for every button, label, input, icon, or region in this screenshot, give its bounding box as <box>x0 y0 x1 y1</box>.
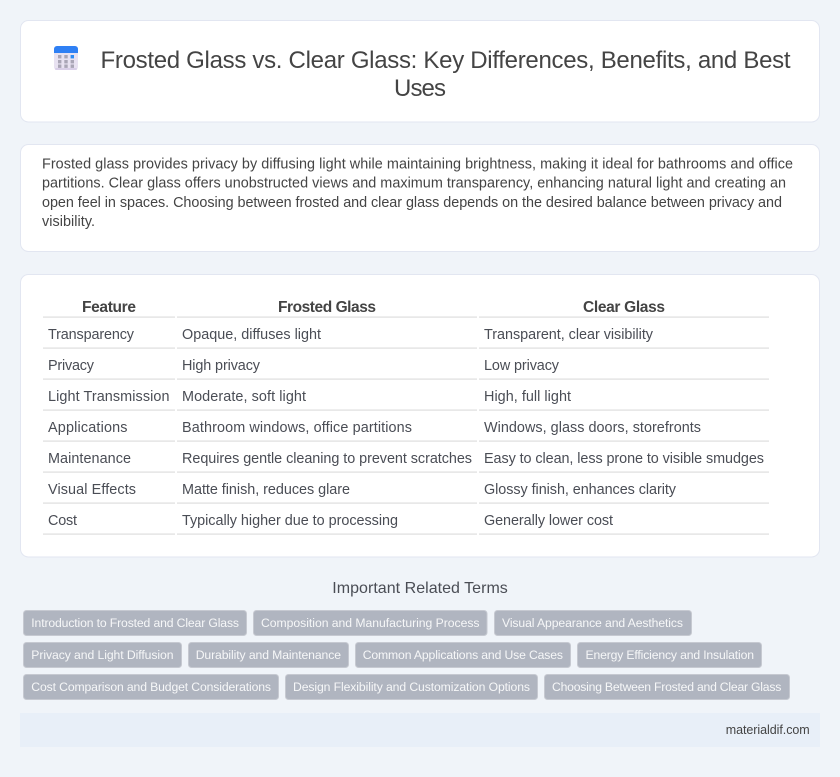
panel: related term tags <box>24 610 790 700</box>
row: visual effects: Matte finish, reduces glare <box>182 482 350 498</box>
footer: materialdif.com <box>726 723 810 737</box>
text block: introduction paragraph: visibility. <box>42 214 95 230</box>
row: maintenance: Easy to clean, less prone to visible smudges <box>484 451 764 467</box>
row: transparency: Transparent, clear visibility <box>484 327 654 343</box>
row: maintenance: Maintenance <box>48 451 131 467</box>
panel: title card <box>20 20 820 122</box>
tag <box>24 610 246 636</box>
row: privacy: Privacy <box>48 358 95 374</box>
text block: introduction paragraph <box>42 156 793 230</box>
panel: introduction <box>20 144 820 252</box>
tag: Durability and Maintenance <box>196 648 341 662</box>
tag <box>494 610 692 636</box>
row: cost: Generally lower cost <box>484 513 613 529</box>
table header <box>82 299 665 316</box>
tag <box>188 642 348 668</box>
row: visual effects <box>48 482 677 498</box>
tag: Visual Appearance and Aesthetics <box>502 616 683 630</box>
row: applications <box>48 420 701 436</box>
tag <box>254 610 487 636</box>
heading: important related terms: Important Related Terms <box>332 580 508 597</box>
tag <box>356 642 570 668</box>
row: light transmission <box>48 389 571 405</box>
row: cost: Cost <box>48 513 77 529</box>
table header: Frosted Glass <box>278 299 376 316</box>
row: cost <box>48 513 613 529</box>
footer <box>20 713 820 747</box>
row: transparency: Transparency <box>48 327 135 343</box>
row: light transmission: High, full light <box>484 389 571 405</box>
tag: Choosing Between Frosted and Clear Glass <box>552 680 781 694</box>
row: visual effects: Glossy finish, enhances clarity <box>484 482 677 498</box>
row: cost: Typically higher due to processing <box>182 513 398 529</box>
row: privacy: Low privacy <box>484 358 560 374</box>
tag <box>24 674 278 700</box>
title: Uses <box>394 75 446 102</box>
tag: Common Applications and Use Cases <box>363 648 563 662</box>
row: applications: Applications <box>48 420 128 436</box>
row: maintenance <box>48 451 764 467</box>
text block: introduction paragraph: Frosted glass provides privacy by diffusing light while maintaining brightness, making it ideal for bathrooms and office <box>42 156 793 172</box>
title: Frosted Glass vs. Clear Glass: Key Differences, Benefits, and Best <box>100 47 791 74</box>
icon: calendar <box>54 46 78 70</box>
row: privacy: High privacy <box>182 358 261 374</box>
title <box>100 47 791 102</box>
row: light transmission: Light Transmission <box>48 389 170 405</box>
tag: Design Flexibility and Customization Options <box>293 680 530 694</box>
row: applications: Bathroom windows, office partitions <box>182 420 412 436</box>
row: light transmission: Moderate, soft light <box>182 389 306 405</box>
tag: Privacy and Light Diffusion <box>31 648 173 662</box>
row: maintenance: Requires gentle cleaning to prevent scratches <box>182 451 472 467</box>
tag: Cost Comparison and Budget Considerations <box>31 680 271 694</box>
row: visual effects: Visual Effects <box>48 482 136 498</box>
table header: Clear Glass <box>583 299 665 316</box>
tag: Introduction to Frosted and Clear Glass <box>31 616 239 630</box>
text block: introduction paragraph: open feel in spaces. Choosing between frosted and clear glass depends on the desired balance between privacy and <box>42 195 782 211</box>
row: transparency: Opaque, diffuses light <box>182 327 321 343</box>
panel: comparison table <box>20 274 820 557</box>
row: privacy <box>48 358 560 374</box>
text block: introduction paragraph: partitions. Clear glass offers unobstructed views and maximum transparency, enhancing natural light and creating an <box>42 176 786 192</box>
row: transparency <box>48 327 654 343</box>
tag <box>544 674 790 700</box>
tag: Composition and Manufacturing Process <box>261 616 480 630</box>
tag <box>24 642 182 668</box>
tag <box>286 674 538 700</box>
tag <box>578 642 762 668</box>
table header: Feature <box>82 299 136 316</box>
tag: Energy Efficiency and Insulation <box>586 648 754 662</box>
row: applications: Windows, glass doors, storefronts <box>484 420 701 436</box>
